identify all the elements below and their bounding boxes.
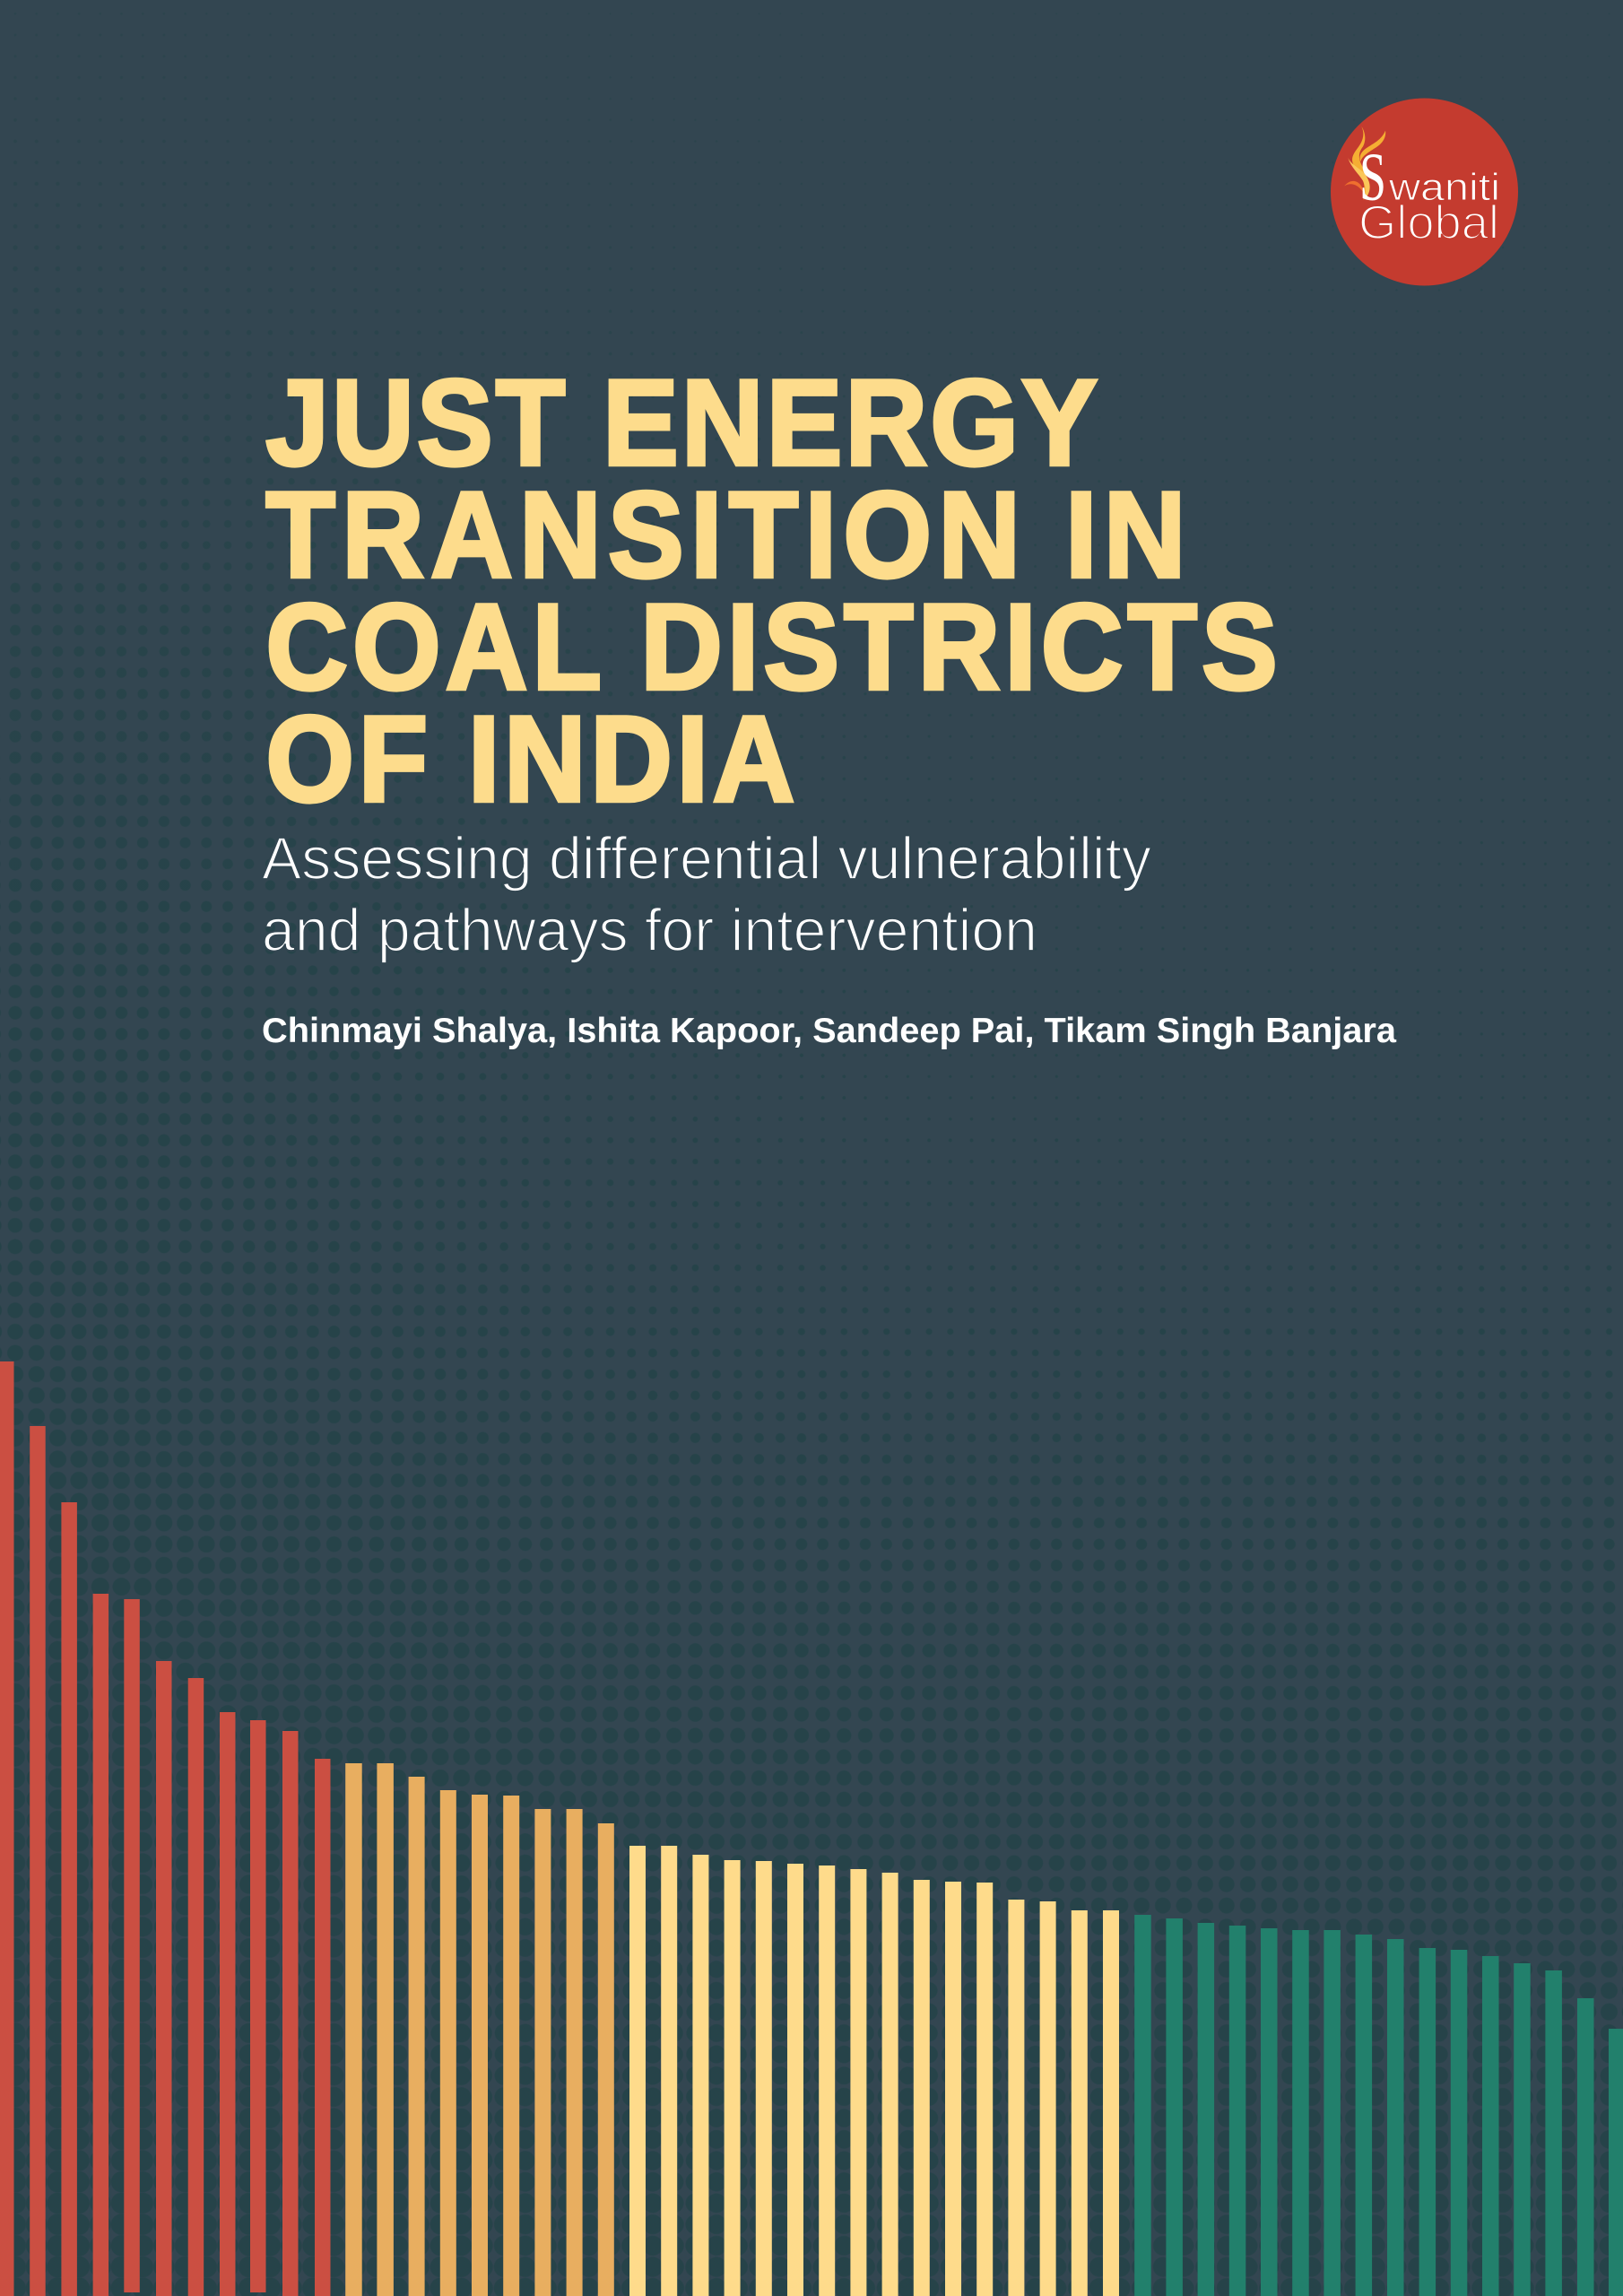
title bbox=[265, 354, 1278, 827]
bars: red group bbox=[0, 1361, 330, 2296]
subtitle bbox=[262, 825, 1151, 964]
bar chart: vulnerability ranking of districts bbox=[0, 1361, 1623, 2296]
bars: yellow group bbox=[629, 1846, 1119, 2296]
bars: green group bbox=[1134, 1915, 1623, 2296]
icon: flame bbox=[1344, 126, 1385, 200]
title: TRANSITION IN bbox=[265, 466, 1185, 603]
title: OF INDIA bbox=[265, 691, 794, 827]
authors: Chinmayi Shalya, Ishita Kapoor, Sandeep Pai, Tikam Singh Banjara bbox=[262, 1012, 1396, 1050]
logo disc bbox=[1331, 99, 1518, 285]
logo: Swaniti Global bbox=[1331, 99, 1518, 285]
title: COAL DISTRICTS bbox=[265, 578, 1278, 715]
subtitle: Assessing differential vulnerability bbox=[262, 825, 1151, 892]
title: JUST ENERGY bbox=[265, 354, 1098, 491]
logo wordmark waniti: waniti bbox=[1388, 166, 1500, 209]
logo wordmark S: S bbox=[1359, 140, 1386, 215]
logo wordmark Global: Global bbox=[1358, 196, 1499, 249]
subtitle: and pathways for intervention bbox=[262, 897, 1037, 964]
bars: orange group bbox=[345, 1763, 614, 2296]
